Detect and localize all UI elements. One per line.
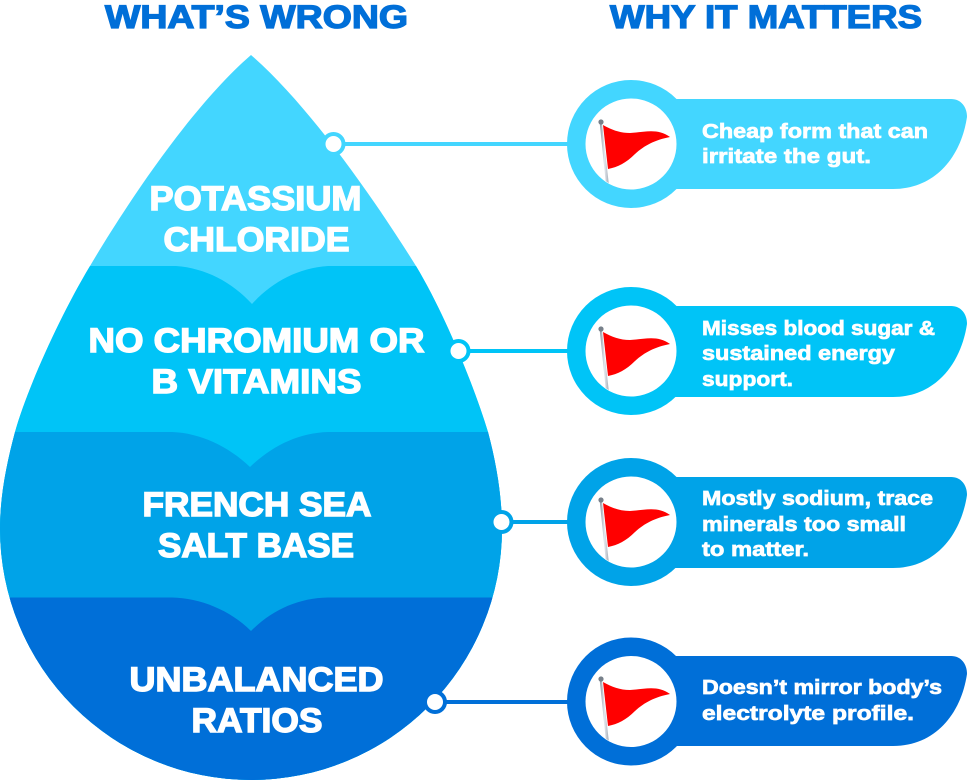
connector: row 3 bbox=[490, 510, 574, 534]
water drop with four layers bbox=[0, 50, 510, 780]
connector: row 4 bbox=[423, 690, 575, 714]
drop label: potassium chloride: CHLORIDE bbox=[164, 221, 350, 259]
drop label: unbalanced ratios bbox=[130, 661, 384, 740]
drop label: unbalanced ratios: RATIOS bbox=[192, 702, 322, 740]
text: row 3 bbox=[702, 488, 933, 561]
panel: row 2 bbox=[567, 287, 967, 415]
drop label: french sea salt base: SALT BASE bbox=[158, 527, 354, 565]
connector: row 1 bbox=[322, 132, 574, 156]
icon: red flag bbox=[598, 676, 670, 747]
text: row 4: Doesn’t mirror body’s bbox=[702, 677, 942, 699]
panel: row 3 bbox=[567, 458, 967, 586]
drop label: unbalanced ratios: UNBALANCED bbox=[130, 661, 384, 699]
connector: row 2 bbox=[446, 339, 574, 363]
drop label: no chromium or b vitamins: B VITAMINS bbox=[152, 363, 362, 401]
drop label: french sea salt base bbox=[142, 486, 372, 565]
drop label: potassium chloride bbox=[150, 180, 362, 259]
icon: red flag bbox=[598, 326, 670, 397]
text: row 2 bbox=[702, 318, 935, 391]
text: row 1: irritate the gut. bbox=[702, 146, 871, 168]
drop label: french sea salt base: FRENCH SEA bbox=[142, 486, 372, 524]
text: row 2: support. bbox=[702, 369, 793, 391]
panel: row 1 bbox=[567, 80, 967, 208]
text: row 4: electrolyte profile. bbox=[702, 703, 914, 725]
text: row 2: Misses blood sugar & bbox=[702, 318, 935, 340]
icon: red flag bbox=[598, 119, 670, 190]
drop label: no chromium or b vitamins bbox=[88, 322, 424, 401]
heading: why it matters: WHY IT MATTERS bbox=[610, 0, 922, 35]
text: row 3: minerals too small bbox=[702, 514, 906, 536]
panel: row 4 bbox=[567, 638, 967, 766]
icon: red flag bbox=[598, 497, 670, 568]
text: row 3: Mostly sodium, trace bbox=[702, 488, 933, 510]
drop label: potassium chloride: POTASSIUM bbox=[150, 180, 362, 218]
text: row 3: to matter. bbox=[702, 539, 809, 561]
text: row 2: sustained energy bbox=[702, 343, 896, 365]
text: row 1: Cheap form that can bbox=[702, 121, 928, 143]
drop label: no chromium or b vitamins: NO CHROMIUM OR bbox=[88, 322, 424, 360]
text: row 4 bbox=[702, 677, 942, 725]
text: row 1 bbox=[702, 121, 928, 168]
heading: what's wrong: WHAT’S WRONG bbox=[105, 0, 408, 35]
